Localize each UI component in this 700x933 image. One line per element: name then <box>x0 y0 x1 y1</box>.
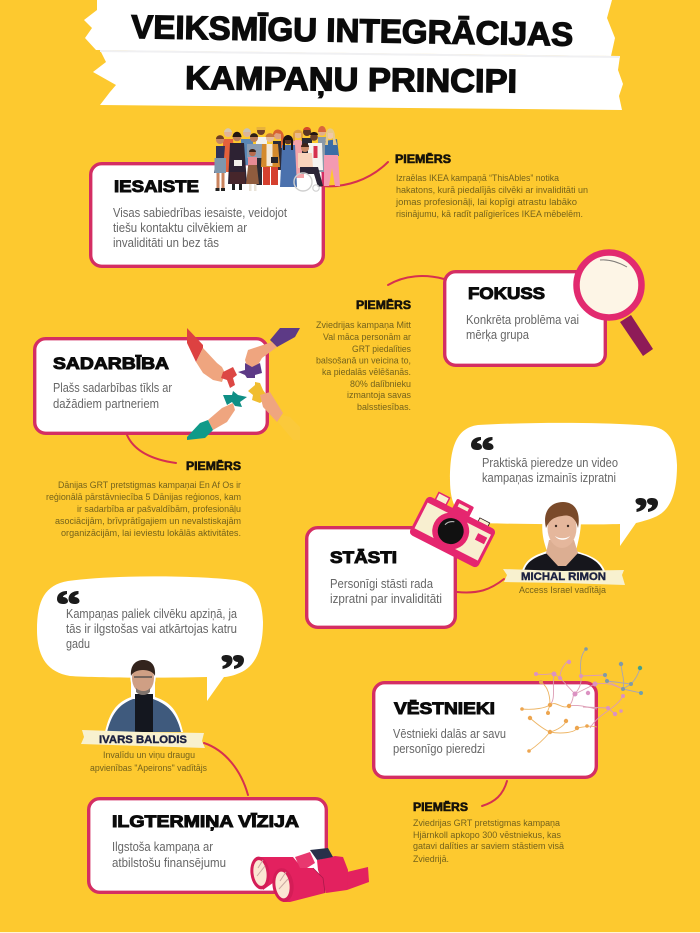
text: vizija description <box>112 839 226 870</box>
heading: fokuss: FOKUSS <box>468 284 545 303</box>
text: quote <box>66 606 238 651</box>
text: stasti description <box>330 576 442 606</box>
example: fokuss: GRT piedalīties <box>352 344 411 355</box>
example: vestnieki: Zviedrijas GRT pretstigmas kampaņa <box>413 818 561 829</box>
icon: closing quote <box>636 498 658 512</box>
title banner: VEIKSMĪGU INTEGRĀCIJAS <box>131 8 573 53</box>
back row <box>223 139 235 172</box>
example: iesaiste: jomas profesionāļi, lai kopīgi atrastu labāko <box>395 197 577 208</box>
front row <box>214 146 226 173</box>
speech bubble: michal rimon quote <box>450 423 677 546</box>
panel: stasti <box>307 528 455 627</box>
text: fokuss description <box>466 312 579 342</box>
text: quote: Praktiskā pieredze un video <box>482 455 618 470</box>
text: iesaiste description: tiešu kontaktu cilvēkiem ar <box>113 220 248 235</box>
example: vestnieki: Hjärnkoll apkopo 300 vēstniekus, kas <box>413 830 561 841</box>
blonde woman <box>324 128 340 186</box>
heading: stasti: STĀSTI <box>330 548 397 567</box>
text: iesaiste description <box>113 205 287 250</box>
example: fokuss <box>316 300 412 413</box>
example: iesaiste: PIEMĒRS <box>395 154 451 166</box>
arrow: fokuss to example <box>388 276 444 285</box>
text: fokuss description: Konkrēta problēma vai <box>466 312 579 327</box>
icon: opening quote <box>57 591 80 604</box>
photo: michal rimon <box>522 500 605 571</box>
example: sadarbiba: asociācijām, brīvprātīgajiem un nevalstiskajām <box>55 516 241 527</box>
text: quote <box>482 455 618 485</box>
example: vestnieki: PIEMĒRS <box>413 802 468 814</box>
text: quote: kampaņas izmainīs izpratni <box>482 470 616 485</box>
label: michal rimon name <box>503 569 625 596</box>
example: sadarbiba: reģionālā pārstāvniecība 5 Dānijas reģionos, kam <box>46 492 241 503</box>
text: quote: tās ir ilgstošas vai atkārtojas katru <box>66 621 237 636</box>
label: ivars balodis name <box>81 730 207 774</box>
icon: closing quote <box>222 655 244 669</box>
title banner: KAMPAŅU PRINCIPI <box>185 59 517 99</box>
example: vestnieki <box>413 802 565 865</box>
icon: binoculars <box>249 848 369 903</box>
text: stasti description: Personīgi stāsti rada <box>330 576 434 591</box>
heading: vestnieki: VĒSTNIEKI <box>394 699 495 718</box>
text: sadarbiba description: dažādiem partneriem <box>53 396 159 411</box>
heading: iesaiste: IESAISTE <box>114 177 199 196</box>
example: iesaiste: hakatons, kurā piedalījās cilvēki ar invaliditāti un <box>396 185 588 196</box>
arrow: ivars to long-term vision <box>204 743 248 795</box>
speech bubble: ivars balodis quote <box>37 576 263 701</box>
heading: sadarbiba: SADARBĪBA <box>53 354 169 373</box>
text: vestnieki description <box>393 726 506 756</box>
example: fokuss: Val māca personām ar <box>323 332 412 343</box>
arrow: stasti to michal <box>457 579 504 592</box>
example: sadarbiba: Dānijas GRT pretstigmas kampaņai En Af Os ir <box>58 480 242 491</box>
icon: network of dots <box>520 647 643 753</box>
example: sadarbiba: ir sadarbība ar pašvaldībām, profesionāļu <box>77 504 241 515</box>
icon: camera <box>410 487 500 567</box>
example: fokuss: Zviedrijas kampaņa Mitt <box>316 320 411 331</box>
text: stasti description: izpratni par invaliditāti <box>330 591 442 606</box>
title banner <box>84 0 623 110</box>
label: ivars balodis name: Invalīdu un viņu draugu <box>103 750 195 761</box>
text: vestnieki description: Vēstnieki dalās ar savu <box>393 726 506 741</box>
example: fokuss: balsošanā un veicina to, <box>316 356 411 366</box>
example: fokuss: izmantoja savas <box>347 390 411 401</box>
example: iesaiste <box>395 154 588 220</box>
example: vestnieki: Zviedrijā. <box>413 854 449 865</box>
text: sadarbiba description: Plašs sadarbības tīkls ar <box>53 380 173 395</box>
text: quote: gadu <box>66 636 90 651</box>
example: fokuss: ka piedalās vēlēšanās. <box>322 367 411 378</box>
example: iesaiste: risinājumu, kā radīt palīgierīces IKEA mēbelēm. <box>396 209 583 220</box>
text: quote: Kampaņas paliek cilvēku apziņā, ja <box>66 606 238 621</box>
example: sadarbiba: organizācijām, lai ieviestu lokālās aktivitātes. <box>61 528 241 539</box>
text: sadarbiba description <box>53 380 173 411</box>
example: fokuss: 80% dalībnieku <box>350 379 411 390</box>
label: ivars balodis name: apvienības "Apeirons" vadītājs <box>90 763 207 774</box>
icon: opening quote <box>471 437 494 450</box>
example: fokuss: balsstiesības. <box>357 402 411 413</box>
icon: magnifying glass <box>576 252 653 356</box>
panel: iesaiste <box>91 164 323 266</box>
icon: group of people <box>214 126 340 191</box>
icon: hands with puzzle pieces <box>187 328 300 440</box>
text: vizija description: Ilgstoša kampaņa ar <box>112 839 214 854</box>
text: iesaiste description: Visas sabiedrības iesaiste, veidojot <box>113 205 287 220</box>
panel: vestnieki <box>374 683 596 777</box>
arrow: iesaiste to example <box>322 162 388 186</box>
panel: fokuss <box>445 272 605 365</box>
heading: ilgtermina vizija: ILGTERMIŅA VĪZIJA <box>112 812 299 831</box>
text: vizija description: atbilstošu finansējumu <box>112 855 226 870</box>
photo: ivars balodis <box>105 658 183 732</box>
arrow: sadarbiba to example <box>127 435 176 463</box>
text: iesaiste description: invaliditāti un bez tās <box>113 235 219 250</box>
example: iesaiste: Izraēlas IKEA kampaņā “ThisAbles” notika <box>396 173 560 184</box>
arrow: vestnieki to example <box>482 781 507 806</box>
text: fokuss description: mērķa grupa <box>466 327 530 342</box>
panel: sadarbiba <box>35 339 267 433</box>
label: michal rimon name: Access Israel vadītāja <box>519 585 607 596</box>
example: vestnieki: gatavi dalīties ar saviem stāstiem visā <box>413 841 565 852</box>
text: vestnieki description: personīgo pieredzi <box>393 741 485 756</box>
example: sadarbiba: PIEMĒRS <box>186 461 241 473</box>
example: sadarbiba <box>46 461 242 539</box>
label: michal rimon name: MICHAL RIMON <box>521 571 606 583</box>
label: ivars balodis name: IVARS BALODIS <box>99 734 187 746</box>
example: fokuss: PIEMĒRS <box>356 300 411 312</box>
panel: ilgtermina vizija <box>89 799 326 892</box>
